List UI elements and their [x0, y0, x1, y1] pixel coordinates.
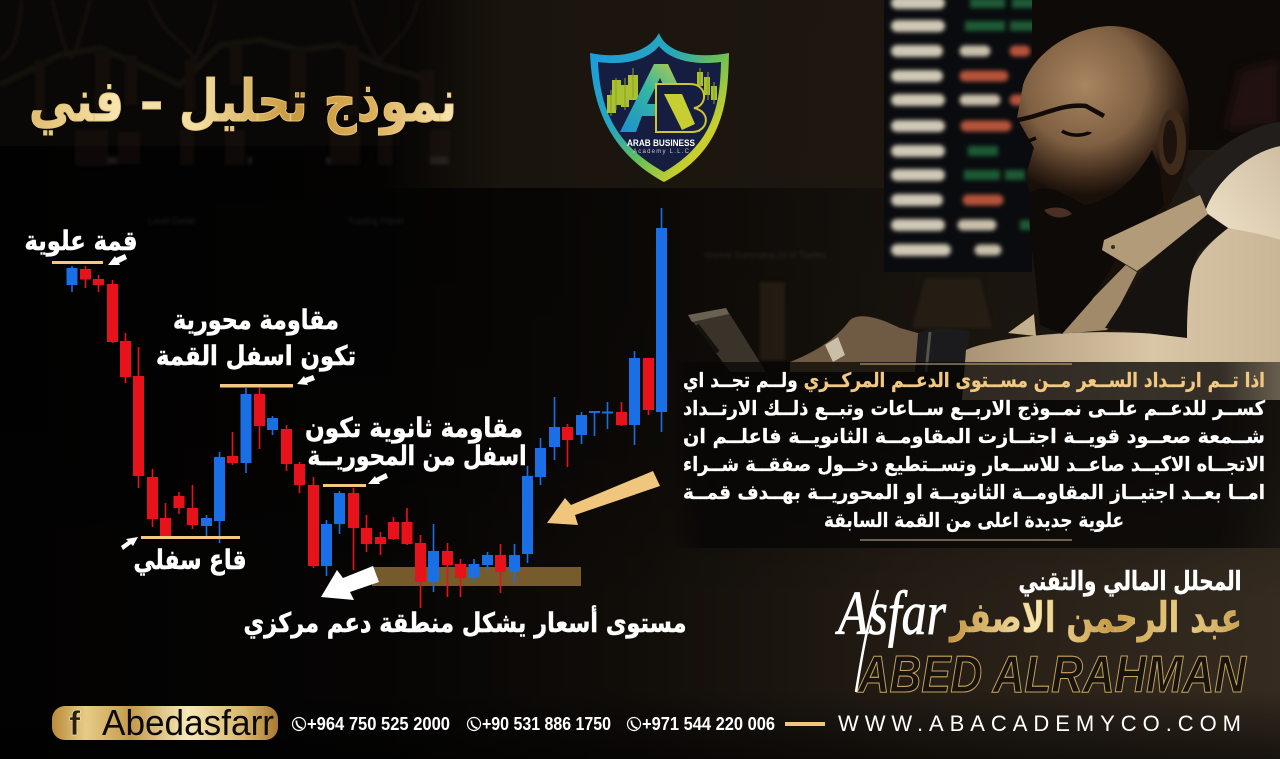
dark room behind the man [760, 0, 1280, 360]
shirt sleeve [962, 228, 1280, 400]
contact: Iraq phone: +964 750 525 2000 [307, 714, 450, 734]
shirt left edge [1008, 314, 1036, 336]
label: higher high: قمة علوية [24, 226, 138, 257]
facebook pill [52, 702, 278, 743]
label: secondary resistance: مقاومة ثانوية تكون [305, 413, 523, 444]
blurred background chart [0, 0, 450, 166]
body copy: شــمعة صعــود قويــة اجتــازت المقاومــة الثانويــة فاعلــم ان [683, 424, 1265, 448]
panel: explanation [672, 362, 1280, 548]
head [1017, 26, 1189, 332]
shirt front [1060, 250, 1137, 334]
label: pivot resistance: تكون اسفل القمة [156, 341, 356, 372]
red candles [86, 266, 648, 608]
label: pivot resistance: مقاومة محورية [173, 305, 339, 336]
logo wordmark: ARAB BUSINESS [627, 138, 695, 149]
icon: facebook: f [69, 705, 81, 743]
candlestick chart [72, 208, 662, 608]
forearm and hand [790, 316, 930, 372]
label: secondary resistance: اسفل من المحوريــة [308, 441, 526, 472]
waistcoat [1105, 213, 1228, 338]
facebook handle: Abedasfarr [102, 702, 274, 743]
signature: Asfar: Asfar [835, 580, 947, 648]
faint background labels: Level Detail [148, 216, 195, 226]
level line: lower low [141, 536, 240, 539]
arrow: lower low [121, 537, 138, 550]
label: lower low: قاع سفلي [134, 545, 246, 576]
faint background labels [148, 216, 827, 260]
blue candles [72, 208, 662, 592]
label: pivot resistance [156, 305, 356, 372]
chair [1187, 122, 1280, 240]
arrow: support zone [321, 566, 379, 600]
footer divider [785, 722, 825, 726]
level line: pivot resistance [220, 384, 293, 388]
signature stroke [856, 590, 878, 692]
lips [1044, 207, 1072, 217]
beard [1029, 150, 1164, 334]
logo candles [607, 68, 717, 116]
website: WWW.ABACADEMYCO.COM [838, 711, 1241, 736]
body copy: علوية جديدة اعلى من القمة السابقة [824, 508, 1124, 532]
arrow: pivot resistance [297, 375, 315, 385]
level line: higher high [52, 261, 103, 264]
arrow: breakout [547, 471, 660, 525]
body copy [683, 396, 1265, 532]
contact: UAE phone: +971 544 220 006 [642, 714, 775, 734]
label: secondary resistance [305, 413, 526, 472]
faint background labels: List of Trades [772, 250, 827, 260]
faint background labels: Market Summary [704, 250, 773, 260]
shirt collar [1102, 195, 1208, 271]
wristwatch [915, 329, 970, 372]
contact: Turkey phone: +90 531 886 1750 [482, 714, 611, 734]
logo shield [590, 33, 729, 182]
logo subtitle: Academy L.L.C [633, 149, 690, 155]
label: central support: مستوى أسعار يشكل منطقة دعم مركزي [244, 605, 686, 639]
market table screen [884, 0, 1042, 272]
support zone band [372, 567, 581, 586]
level line: secondary resistance [323, 484, 366, 487]
phone in hand [688, 308, 766, 372]
title: نموذج تحليل – فني [29, 67, 457, 136]
arrow: higher high [108, 254, 127, 265]
faint background labels: Trading Panel [348, 216, 404, 226]
arrow: secondary resistance [368, 473, 388, 484]
logo AB letters [620, 64, 706, 132]
